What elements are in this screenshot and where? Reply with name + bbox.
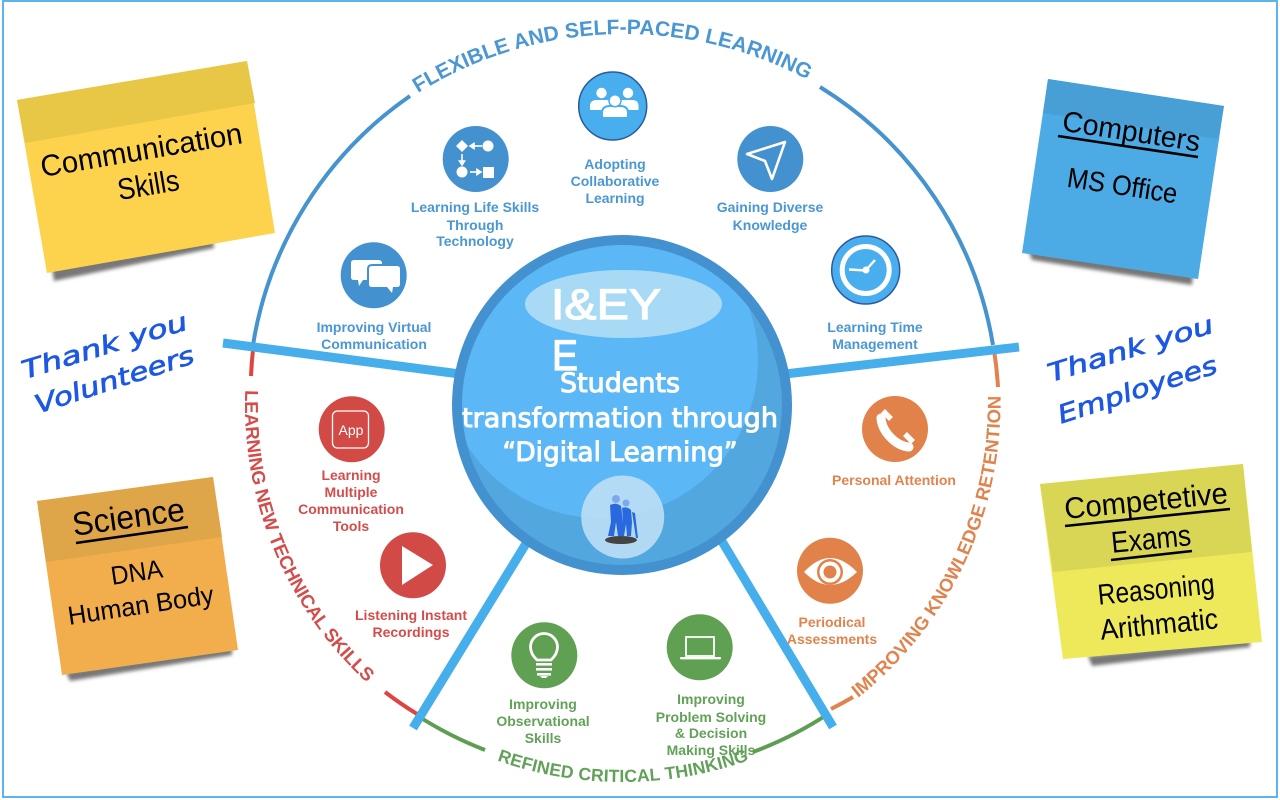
item: Gaining Diverse Knowledge: Gaining Diverse (717, 199, 824, 215)
item: Learning Multiple Communication Tools: Communication (298, 501, 404, 517)
item: Learning Life Skills (411, 126, 539, 249)
icon: paper plane (737, 126, 803, 192)
item: Improving Virtual Communication (317, 242, 431, 352)
item: Improving Observational Skills: Improving (509, 696, 577, 712)
item: Learning Time Management: Learning Time (827, 319, 923, 335)
item: Gaining Diverse Knowledge (717, 126, 824, 233)
item: Listening Instant Recordings: Listening Instant (355, 607, 467, 623)
central title (462, 368, 778, 468)
icon: phone (862, 396, 928, 462)
item: Learning Multiple Communication Tools: Learning (321, 467, 381, 483)
arc heading: refined critical thinking: REFINED CRITICAL THINKING (498, 749, 748, 782)
central title: “Digital Learning” (502, 437, 738, 468)
sticky note: Communication Skills: Communication (38, 117, 245, 184)
item: Improving Observational Skills (496, 622, 590, 746)
item: Improving Problem Solving and Decision Making Skills: & Decision (675, 725, 747, 741)
sticky note: Competetive Exams: Exams (1110, 519, 1192, 560)
item: Improving Observational Skills: Skills (525, 730, 561, 746)
outer arc: knowledge retention (orange) (831, 350, 998, 709)
item: Improving Problem Solving and Decision Making Skills: Improving (677, 691, 745, 707)
handwritten note: Thank you Volunteers (18, 307, 198, 419)
central title: transformation through (462, 403, 778, 434)
sticky note: Competetive Exams: Reasoning (1096, 568, 1216, 612)
handwritten note: Thank you Employees (1044, 310, 1221, 429)
item: Gaining Diverse Knowledge: Knowledge (733, 217, 808, 233)
sector dividers (223, 343, 1019, 728)
item: Learning Life Skills: Technology (436, 233, 514, 249)
icon: eye (797, 538, 863, 604)
item: Learning Multiple Communication Tools: Multiple (325, 484, 378, 500)
item: Improving Observational Skills: Observational (496, 713, 590, 729)
item: Learning Life Skills: Learning Life Skills (411, 199, 539, 215)
logo ellipse: I&EY (525, 270, 722, 380)
item: Improving Virtual Communication: Communication (321, 336, 427, 352)
item: Improving Virtual Communication: Improving Virtual (317, 319, 431, 335)
sticky note: Communication Skills: Skills (115, 164, 182, 207)
sticky note: Science: Science (70, 490, 187, 543)
icon: walking elders (581, 476, 664, 558)
item: Periodical Assessments: Periodical (799, 614, 865, 630)
arc heading: flexible and self-paced learning: FLEXIBLE AND SELF-PACED LEARNING (412, 20, 812, 92)
outer arc: critical thinking (green) (418, 714, 828, 752)
item: Adopting Collaborative Learning: Collaborative (571, 173, 660, 189)
logo ellipse: I&EY: I&EY (551, 281, 661, 329)
arc heading: learning new technical skills: LEARNING NEW TECHNICAL SKILLS (245, 391, 374, 681)
icon: laptop (667, 614, 733, 680)
icon: light bulb (511, 622, 577, 688)
sticky note: Science: Human Body (66, 579, 216, 631)
item: Improving Problem Solving and Decision Making Skills: Problem Solving (656, 709, 766, 725)
sticky note: Computers (1022, 79, 1224, 285)
arc heading: improving knowledge retention: IMPROVING KNOWLEDGE RETENTION (851, 397, 1001, 698)
sticky note: Competetive Exams: Competetive (1063, 477, 1229, 526)
outer arc: flexible learning (blue) (253, 87, 993, 345)
handwritten note: Thank you Employees: Thank you (1044, 310, 1217, 388)
outer arc: technical skills (red) (251, 350, 417, 714)
item: Adopting Collaborative Learning: Adopting (584, 156, 646, 172)
item: Personal Attention: Personal Attention (832, 472, 956, 488)
item: Personal Attention (832, 396, 956, 488)
item: Listening Instant Recordings (355, 532, 467, 640)
handwritten note: Thank you Volunteers: Volunteers (31, 340, 198, 419)
item: Learning Time Management (827, 236, 923, 352)
item: Periodical Assessments: Assessments (787, 631, 877, 647)
item: Improving Problem Solving and Decision Making Skills: Making Skills (667, 742, 756, 758)
handwritten note: Thank you Employees: Employees (1054, 350, 1221, 429)
handwritten note: Thank you Volunteers: Thank you (18, 307, 191, 385)
item: Learning Life Skills: Through (447, 217, 503, 233)
icon: app: App (339, 422, 364, 438)
icon: chat bubbles (341, 242, 407, 308)
icon: clock (832, 236, 900, 304)
item: Adopting Collaborative Learning: Learning (585, 190, 645, 206)
logo ellipse: I&EY: E (552, 332, 578, 380)
central circle (452, 235, 792, 575)
sticky note: Communication Skills (17, 61, 275, 281)
sticky note: Science: DNA (109, 553, 165, 591)
sticky note: Science (37, 477, 238, 681)
sticky note: Competetive Exams (1040, 464, 1262, 666)
item: Learning Multiple Communication Tools (298, 396, 404, 534)
item: Learning Multiple Communication Tools: Tools (333, 518, 369, 534)
item: Listening Instant Recordings: Recordings (372, 624, 450, 640)
item: Learning Time Management: Management (832, 336, 918, 352)
icon: flow diagram (443, 126, 509, 192)
item: Improving Problem Solving and Decision Making Skills (656, 614, 766, 758)
sticky note: Competetive Exams: Arithmatic (1099, 603, 1219, 647)
item: Periodical Assessments (787, 538, 877, 647)
sticky note: Computers: Computers (1060, 106, 1202, 158)
icon: play (380, 532, 446, 598)
central title: Students (560, 368, 680, 399)
icon: people group (579, 72, 647, 140)
sticky note: Computers: MS Office (1065, 162, 1180, 209)
item: Adopting Collaborative Learning (571, 72, 660, 206)
